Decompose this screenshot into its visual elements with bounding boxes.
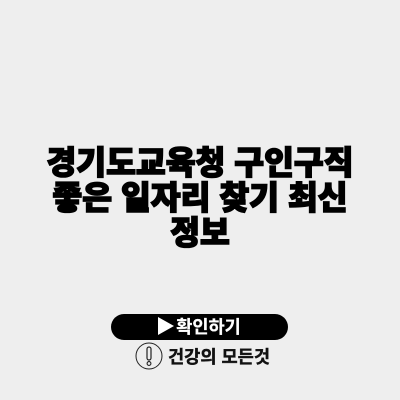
title: 정보 bbox=[170, 215, 230, 251]
brand name: 건강의 모든것 bbox=[168, 347, 270, 367]
title bbox=[46, 145, 354, 251]
title: 좋은 일자리 찾기 최신 bbox=[52, 180, 348, 216]
icon: exclamation in circle bbox=[136, 342, 162, 370]
button: confirm: 확인하기 bbox=[176, 317, 241, 337]
title: 경기도교육청 구인구직 bbox=[46, 145, 354, 181]
brand row: warning icon and name bbox=[136, 342, 270, 370]
button: confirm bbox=[111, 314, 288, 340]
